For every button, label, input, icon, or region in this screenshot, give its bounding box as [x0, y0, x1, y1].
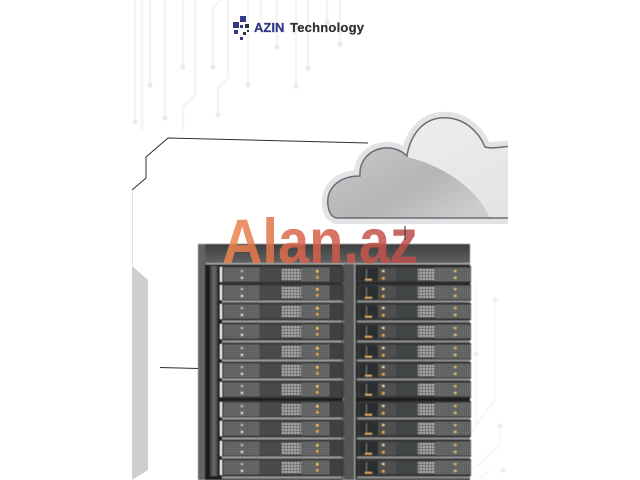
- infographic canvas: [132, 0, 508, 480]
- icon: logo squares: [233, 16, 249, 40]
- cloud outline: [328, 118, 512, 218]
- cloud halo: [328, 118, 512, 218]
- cloud shaded area: [328, 148, 490, 218]
- server units: left column: [220, 266, 344, 478]
- watermark: Alan.az: Alan.az: [222, 207, 418, 277]
- rack frame: [198, 244, 470, 480]
- rack top band: [198, 244, 470, 264]
- logo: AZIN Technology: [233, 16, 365, 40]
- connector line: cloud to rack: [404, 226, 406, 240]
- left edge panel: [132, 190, 148, 480]
- server units: right column: [357, 266, 471, 478]
- background circuit lines: top: [132, 0, 342, 130]
- rack left post: [198, 244, 218, 480]
- background circuit lines: lower right: [470, 285, 506, 480]
- logo wordmark: AZIN: [254, 20, 284, 35]
- logo wordmark: Technology: [290, 20, 365, 35]
- connector line: top left to cloud: [132, 138, 368, 190]
- connector line: left to server rack: [160, 368, 198, 369]
- cloud body: [410, 118, 459, 150]
- rack centre post: [343, 264, 356, 480]
- server rack: [198, 244, 471, 480]
- cloud icon: [328, 118, 512, 218]
